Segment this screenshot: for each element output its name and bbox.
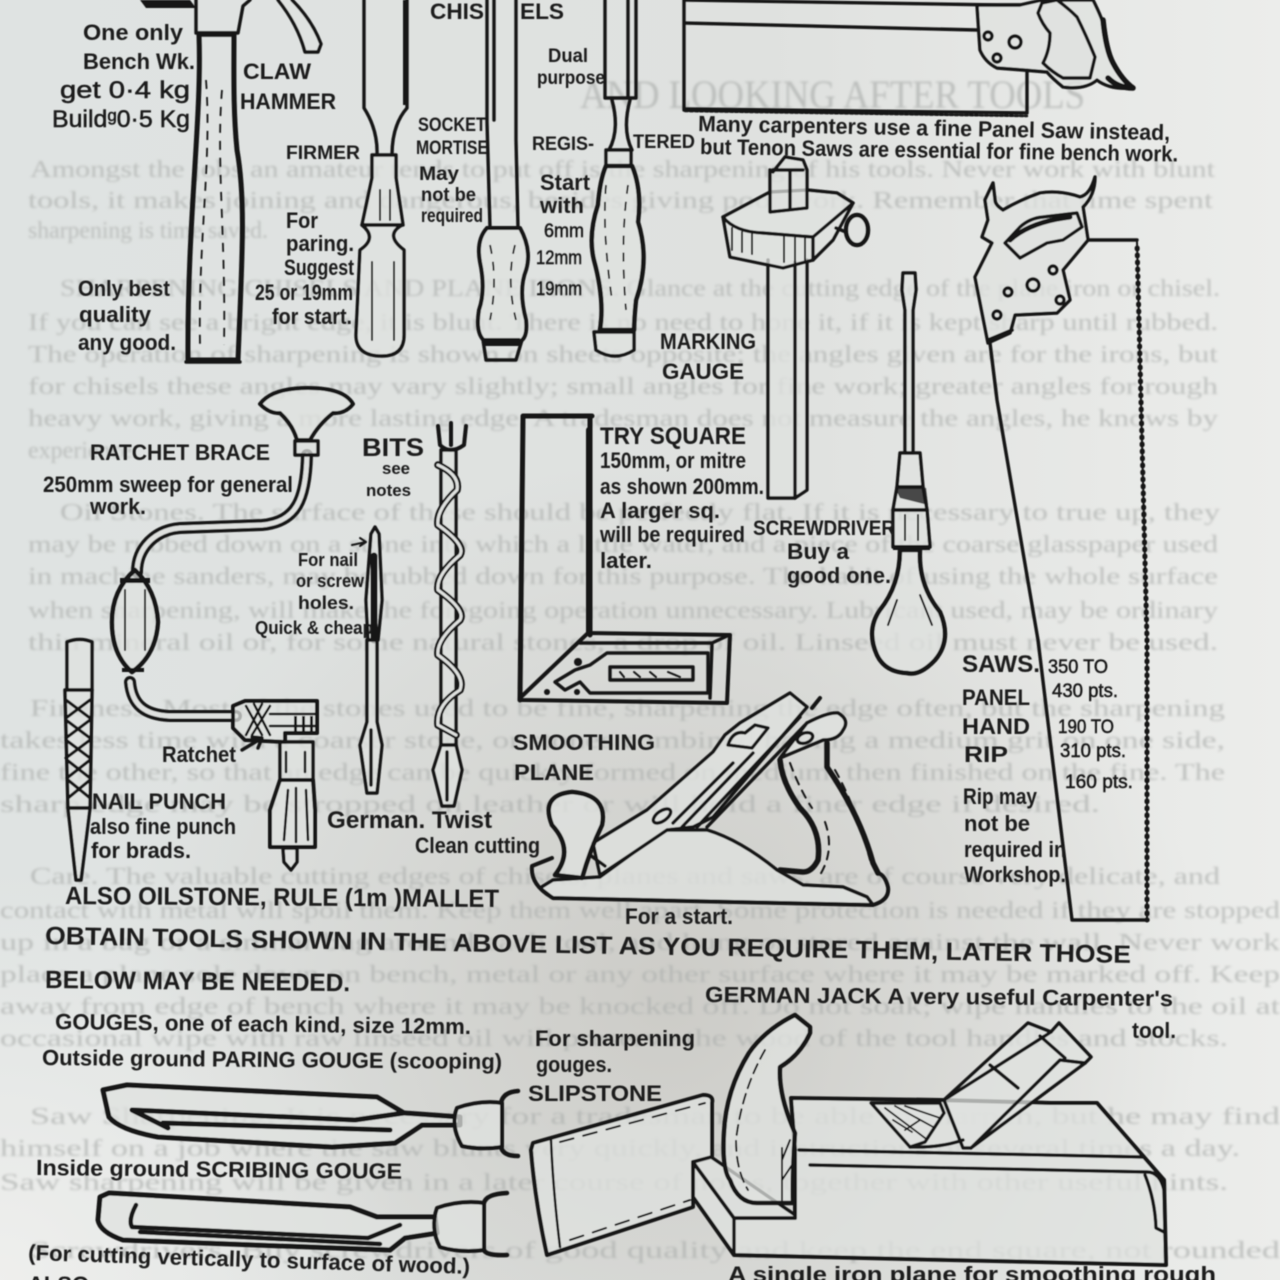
text: bits labels: BITS xyxy=(362,434,424,462)
text: bits labels: holes. xyxy=(298,593,354,613)
bleed-through printed page text: tools, it makes joining and dangerous, besides giving poor work. Remember that time spent xyxy=(28,188,1213,214)
bleed-through printed page text: himself on a job where the saw blunts very quickly, and instructions of several times a day. xyxy=(0,1136,1240,1162)
text: list of further tools: GERMAN JACK A very useful Carpenter's xyxy=(705,982,1173,1011)
text: list of further tools: BELOW MAY BE NEEDED. xyxy=(45,966,350,997)
bleed-through printed page text: experience. xyxy=(28,438,138,464)
bleed-through printed page text: sharpening is time saved. xyxy=(28,218,268,244)
text: saw labels: 430 pts. xyxy=(1052,681,1118,702)
text: hammer notes: any good. xyxy=(78,330,176,355)
icon: panel hand saw xyxy=(975,177,1148,920)
text: list of further tools: tool. xyxy=(1132,1018,1176,1043)
text: bits labels: Clean cutting xyxy=(415,833,540,858)
text: chisel labels: 19mm xyxy=(536,279,582,300)
text: saw labels: 160 pts. xyxy=(1065,772,1133,793)
text: chisel labels: MORTISE xyxy=(416,138,488,159)
text: hammer notes xyxy=(52,20,336,355)
icon: german jack plane xyxy=(693,1015,1166,1265)
text: chisel labels: Dual xyxy=(548,46,588,67)
text: bits labels: or screw xyxy=(296,571,365,591)
bleed-through printed page text: when sharpening, will make the foregoing operation unnecessary. Lubricant used, may be ordinary xyxy=(28,598,1218,624)
bleed-through printed page text: takes less time with a coarser stone, or stones combined having a medium grit on one side, xyxy=(0,728,1225,754)
text: saw labels: required in xyxy=(964,837,1066,862)
text: gauge, try square, screwdriver: will be required xyxy=(599,522,745,547)
text: bits labels xyxy=(255,434,540,858)
bleed-through printed page text: contact with metal will spoil them. Keep them well apart. Some protection is needed if they are stopped xyxy=(0,898,1280,924)
icon: twist bit xyxy=(433,423,466,806)
text: chisel labels: 25 or 19mm xyxy=(255,280,353,305)
bleed-through printed page text: Amongst the jobs an amateur tends to put off is the sharpening of his tools. Never work with blunt xyxy=(30,157,1215,183)
text: list of further tools xyxy=(28,882,1216,1280)
text: chisel labels: Suggest xyxy=(284,255,355,280)
text: gauge, try square, screwdriver: as shown 200mm. xyxy=(600,474,764,499)
text: brace label: Ratchet xyxy=(162,742,237,767)
bleed-through printed page text: for chisels these angles may vary slightly; small angles for fine work; greater angles for rough xyxy=(28,374,1218,400)
text: hammer notes: get 0·4 kg xyxy=(60,77,190,104)
text: smoothing plane label: For a start. xyxy=(625,904,733,929)
text: chisel labels: for start. xyxy=(272,304,352,329)
text: gauge, try square, screwdriver xyxy=(599,329,895,588)
text: list of further tools: SLIPSTONE xyxy=(528,1081,662,1106)
bleed-through printed page text: heavy work, giving a more lasting edge. A tradesman does not measure the angles, he knows by xyxy=(28,406,1218,432)
text: brace label: RATCHET BRACE xyxy=(90,440,270,465)
text: chisel labels: purpose xyxy=(537,68,605,89)
text: chisel labels: 6mm xyxy=(544,221,584,242)
text: saw labels xyxy=(962,651,1133,887)
text: gauge, try square, screwdriver: good one. xyxy=(787,563,891,588)
bleed-through printed page text: fine the other, so that an edge can be quickly formed on medium, then finished on the fine. The xyxy=(0,760,1225,786)
text: chisel labels: Start xyxy=(540,170,591,195)
bleed-through printed page text: may be rubbed down on a stone into which a little water, and a piece of the coarse glasspaper used xyxy=(28,532,1218,558)
icon: german bit xyxy=(360,527,382,793)
text: list of further tools: (For cutting vertically to surface of wood.) xyxy=(28,1240,470,1279)
bleed-through printed page text: thin mineral oil or, for some natural stones, a drop of oil. Linseed oil must never be used. xyxy=(28,630,1218,656)
text: chisel labels: with xyxy=(539,193,584,218)
text: saw labels: HAND xyxy=(962,714,1030,739)
text: chisel labels: 12mm xyxy=(536,248,582,269)
bleed-through printed page text: Screwdrivers. Buy screwdrivers of good quality and keep the end square, not rounded xyxy=(30,1238,1280,1264)
text: saw note: Many carpenters use a fine Panel Saw instead, xyxy=(698,111,1170,145)
bleed-through printed page text: Care. The valuable cutting edges of chisels, planes and saws, are of course very delicate, and xyxy=(30,864,1220,890)
bleed-through printed page text: in machine sanders, may be rubbed down for this purpose. The habit of using the whole surface xyxy=(28,564,1218,590)
text: bits labels: German. Twist xyxy=(327,807,492,834)
bleed-through printed page text: sharp edge may be stropped on leather or will hold a finer edge if desired. xyxy=(0,792,1100,818)
icon: slipstone xyxy=(531,1095,712,1255)
text: smoothing plane label: PLANE xyxy=(514,760,594,785)
text: chisel labels: May xyxy=(419,164,459,185)
text: hammer notes: Buildᵍ0·5 Kg xyxy=(52,106,190,133)
text: nail punch label xyxy=(90,789,236,863)
text: list of further tools: ALSO OILSTONE, RULE (1m )MALLET xyxy=(65,882,499,913)
text: saw labels: not be xyxy=(964,811,1030,836)
icon: marking gauge xyxy=(723,157,868,498)
icon: tenon saw xyxy=(684,0,1133,116)
text: gauge, try square, screwdriver: SCREWDRIVER xyxy=(753,517,895,540)
text: list of further tools: For sharpening xyxy=(535,1026,695,1051)
text: chisel labels: required xyxy=(421,206,483,227)
text: chisel labels: SOCKET xyxy=(418,115,486,136)
bleed-through printed page text: away from edge of bench where it may be knocked off. Do not soak; wipe handles to the oil at xyxy=(0,994,1280,1020)
bleed-through printed page text: The operation of sharpening is shown on sheets opposite; the angles given are for the irons, but xyxy=(28,342,1218,368)
text: gauge, try square, screwdriver: A larger sq. xyxy=(600,498,720,523)
text: hammer notes: quality xyxy=(79,302,152,327)
text: bits labels: notes xyxy=(366,481,411,500)
text: gauge, try square, screwdriver: later. xyxy=(600,548,652,573)
icon: ratchet brace xyxy=(112,388,353,870)
bleed-through printed page text: Fineness. Most of the stones used to be fine, sharpening the edge often, but the sharpening xyxy=(30,696,1225,722)
text: chisel labels xyxy=(255,0,695,329)
text: saw labels: 350 TO xyxy=(1048,657,1108,678)
icon: claw hammer xyxy=(140,0,321,362)
text: chisel labels: For xyxy=(286,208,318,233)
text: smoothing plane label: SMOOTHING xyxy=(513,730,655,755)
icon: try square xyxy=(520,416,730,703)
icon: screwdriver xyxy=(872,273,945,673)
bleed-through printed page text: Saw Sharpening. It is necessary for a tradesman to be able to sharpen, but he may find xyxy=(30,1104,1280,1130)
bleed-through printed page text: If you can see a bright edge, it is blunt. There is no need to hone it, if it is kept sharp until rubbed. xyxy=(28,310,1218,336)
text: chisel labels: TERED xyxy=(633,132,695,153)
text: hammer notes: Bench Wk. xyxy=(83,49,195,74)
bleed-through printed page text: SHARPENING CHISELS AND PLANE IRONS. Glance at the cutting edge of the plane iron or chisel. xyxy=(60,276,1220,302)
text: gauge, try square, screwdriver: Buy a xyxy=(787,539,850,564)
text: saw note xyxy=(698,111,1178,167)
bleed-through printed page text: up in a bag or a similar bag around each tool, and hung or stored against the wall. Never work xyxy=(0,930,1280,956)
text: bits labels: see xyxy=(382,459,410,478)
icon: socket mortise chisel xyxy=(478,0,528,360)
text: list of further tools: Outside ground PARING GOUGE (scooping) xyxy=(42,1045,502,1074)
text: gauge, try square, screwdriver: 150mm, or mitre xyxy=(600,448,746,473)
text: saw labels: RIP xyxy=(964,742,1008,767)
bleed-through printed page text: place a plane sole down on bench, metal or any other surface where it may be marked off. Keep xyxy=(0,962,1280,988)
icon: scribing gouge xyxy=(98,1193,507,1255)
text: nail punch label: for brads. xyxy=(91,838,191,863)
text: saw labels: 190 TO xyxy=(1058,717,1114,738)
icon: registered chisel xyxy=(592,0,644,356)
text: hammer notes: CLAW xyxy=(243,59,311,84)
text: saw labels: Rip may xyxy=(963,784,1038,809)
text: list of further tools: OBTAIN TOOLS SHOWN IN THE ABOVE LIST AS YOU REQUIRE THEM, LATER THOSE xyxy=(45,922,1131,969)
text: bits labels: For nail xyxy=(298,550,358,570)
text: nail punch label: also fine punch xyxy=(90,814,236,839)
text: chisel labels: not be xyxy=(421,185,476,206)
icon: smoothing plane xyxy=(532,693,888,905)
text: saw labels: SAWS. xyxy=(962,651,1040,678)
text: bits labels: Quick & cheap xyxy=(255,618,373,638)
icon: nail punch xyxy=(65,640,92,880)
text: brace label: work. xyxy=(89,494,146,519)
icon: firmer chisel xyxy=(356,0,407,356)
text: saw labels: Workshop. xyxy=(964,862,1066,887)
bleed-through printed page text: Oil Stones. The surface of these should be perfectly flat. If it is necessary to true up, they xyxy=(60,500,1220,526)
text: hammer notes: One only xyxy=(83,20,184,45)
text: nail punch label: NAIL PUNCH xyxy=(92,789,226,814)
bleed-through printed page text: AND LOOKING AFTER TOOLS xyxy=(580,72,1085,117)
text: gauge, try square, screwdriver: TRY SQUARE xyxy=(600,423,746,450)
text: list of further tools: gouges. xyxy=(536,1052,612,1077)
text: saw labels: PANEL xyxy=(962,685,1030,710)
text: chisel labels: paring. xyxy=(286,231,354,256)
text: saw note: but Tenon Saws are essential for fine bench work. xyxy=(700,134,1178,167)
bleed-through printed page text: occasional wipe with raw linseed oil will preserve the wood of the tool handles and stocks. xyxy=(0,1026,1228,1052)
text: brace label xyxy=(43,440,293,767)
icon: paring gouge xyxy=(103,1085,518,1156)
text: chisel labels: FIRMER xyxy=(286,143,360,164)
text: brace label: 250mm sweep for general xyxy=(43,472,293,497)
text: smoothing plane label xyxy=(513,730,733,929)
text: hammer notes: Only best xyxy=(78,276,171,301)
text: list of further tools: GOUGES, one of each kind, size 12mm. xyxy=(55,1009,471,1039)
text: saw labels: 310 pts. xyxy=(1060,741,1126,762)
text: gauge, try square, screwdriver: GAUGE xyxy=(662,359,744,384)
text: hammer notes: HAMMER xyxy=(240,89,336,114)
text: chisel labels: REGIS- xyxy=(532,134,594,155)
text: list of further tools: Inside ground SCRIBING GOUGE xyxy=(36,1155,402,1184)
bleed-through printed page text: Saw sharpening will be given in a later course of notes, together with other useful hints. xyxy=(0,1170,1228,1196)
text: gauge, try square, screwdriver: MARKING xyxy=(660,329,756,354)
